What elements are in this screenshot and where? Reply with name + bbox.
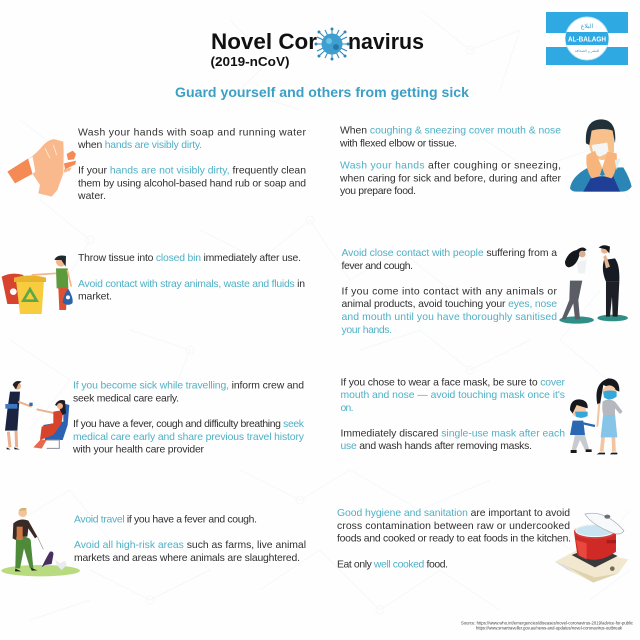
title: Novel Cor	[211, 29, 317, 54]
text: hand washing: water.	[77, 191, 106, 202]
text: close contact: and mouth until you have thoroughly sanitised	[342, 312, 557, 323]
text: close contact: Avoid close contact with people suffering from a	[342, 248, 557, 259]
text: travel sickness: medical care early and share previous travel history	[73, 432, 305, 443]
text: hand washing	[77, 128, 307, 202]
text: close contact: If you come into contact with any animals or	[342, 286, 558, 298]
text: travel sickness: with your health care provider	[72, 444, 205, 456]
icon: flight attendant and passenger	[5, 381, 69, 449]
text: hand washing: Wash your hands with soap and running water	[78, 128, 307, 138]
heading: Guard yourself and others from getting sick	[175, 84, 469, 100]
text: tissue and animals: market.	[78, 292, 112, 302]
icon: man with birds on grass	[1, 508, 80, 576]
logo: Al-Balagh: AL-BALAGH	[568, 34, 606, 44]
text: coughing: when caring for sick and before, during and after	[339, 173, 562, 184]
text: avoid travel: Avoid all high-risk areas such as farms, live animal	[74, 540, 306, 551]
text: avoid travel	[74, 514, 306, 564]
text: face mask: on.	[340, 403, 354, 414]
text: face mask: mouth and nose — avoid touching mask once it's	[340, 390, 565, 401]
logo: Al-Balagh: للنشر و الصحافة	[575, 49, 599, 53]
title	[210, 29, 424, 69]
text: close contact	[342, 248, 558, 336]
text: tissue and animals: Avoid contact with stray animals, waste and fluids in	[78, 279, 305, 290]
text: face mask: use and wash hands after removing masks.	[340, 441, 532, 452]
logo: Al-Balagh	[546, 12, 628, 65]
icon: mother and child in masks	[570, 378, 623, 454]
text: coughing: you prepare food.	[340, 186, 416, 197]
icon: cooking pot on stove	[555, 513, 628, 583]
text: coughing: When coughing & sneezing cover mouth & nose	[340, 126, 561, 136]
text: avoid travel: markets and areas where animals are slaughtered.	[74, 553, 300, 564]
source note	[461, 621, 633, 631]
logo: Al-Balagh: البلاغ	[581, 23, 594, 30]
icon: washing hands	[7, 139, 76, 197]
text: close contact: fever and cough.	[342, 261, 413, 272]
icon: two people keeping distance	[559, 245, 628, 324]
text: hygiene: Good hygiene and sanitation are important to avoid	[337, 508, 570, 519]
text: face mask	[340, 378, 566, 452]
text: travel sickness: If you have a fever, cough and difficulty breathing seek	[73, 419, 305, 430]
text: hand washing: If your hands are not visibly dirty, frequently clean	[78, 166, 306, 176]
text: travel sickness	[72, 380, 305, 456]
source note: Source: https://www.who.int/emergencies/diseases/novel-coronavirus-2019/advice-for-public	[461, 621, 633, 626]
icon: sneezing man	[570, 119, 632, 192]
text: coughing: Wash your hands after coughing or sneezing,	[340, 160, 561, 172]
title: navirus	[348, 29, 424, 54]
text: tissue and animals: Throw tissue into closed bin immediately after use.	[78, 253, 301, 264]
source note: https://www.smartraveller.gov.au/news-and-updates/novel-coronavirus-outbreak	[476, 626, 623, 631]
text: travel sickness: seek medical care early.	[73, 394, 179, 404]
text: close contact: animal products, avoid touching your eyes, nose	[342, 299, 557, 310]
text: coughing: with flexed elbow or tissue.	[339, 138, 457, 150]
text: avoid travel: Avoid travel if you have a fever and cough.	[74, 514, 257, 526]
text: coughing	[339, 126, 562, 197]
text: close contact: your hands.	[342, 325, 392, 336]
text: hygiene: cross contamination between raw or undercooked	[337, 521, 570, 532]
text: hygiene: foods and cooked or ready to eat foods in the kitchen.	[337, 534, 571, 544]
text: face mask: Immediately discared single-use mask after each	[340, 428, 565, 440]
text: travel sickness: If you become sick while travelling, inform crew and	[73, 380, 304, 392]
text: hygiene	[337, 508, 571, 570]
icon: person at bins	[2, 255, 73, 314]
text: hand washing: them by using alcohol-based hand rub or soap and	[78, 178, 306, 190]
text: face mask: If you chose to wear a face mask, be sure to cover	[340, 378, 566, 388]
text: tissue and animals	[78, 253, 305, 302]
title: (2019-nCoV)	[210, 54, 290, 69]
icon: coronavirus	[315, 28, 349, 60]
text: hand washing: when hands are visibly dirty.	[77, 140, 202, 151]
text: hygiene: Eat only well cooked food.	[337, 560, 448, 570]
